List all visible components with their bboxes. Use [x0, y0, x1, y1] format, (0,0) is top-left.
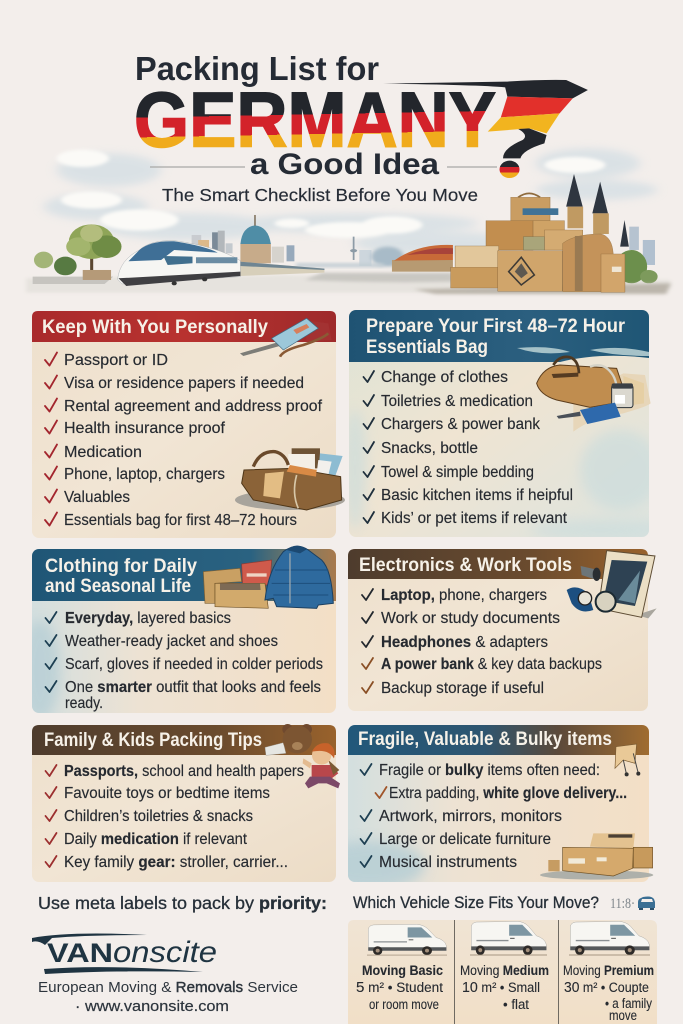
panel: electronics and work tools [348, 549, 657, 711]
checklist: Fragile or bulky items often need: [379, 762, 600, 779]
illustration: cathedral spires [566, 174, 658, 283]
illustration: ground and road [26, 273, 671, 293]
panel heading: Keep With You Personally [42, 317, 268, 338]
icon: duffel bag, jar and blue case [537, 357, 651, 432]
checklist: Health insurance proof [64, 420, 226, 437]
time note: 11:8· [610, 896, 635, 912]
card: moving medium: 10 m² • Small [462, 979, 540, 996]
checklist: Work or study documents [381, 610, 560, 627]
panel heading [32, 311, 336, 342]
card: moving medium [460, 921, 549, 1012]
panel heading: Clothing for Daily [45, 556, 197, 577]
panel: first 48-72 hour essentials bag [343, 310, 670, 540]
checklist: Passport or ID [64, 352, 168, 369]
checklist: Extra padding, white glove delivery... [389, 785, 627, 802]
checklist [46, 610, 323, 712]
illustration: high speed train [118, 241, 324, 286]
heading: which vehicle size: Which Vehicle Size Fits Your Move? [353, 894, 599, 912]
checklist: Key family gear: stroller, carrier... [64, 854, 288, 871]
panel heading [348, 549, 648, 579]
checklist: One smarter outfit that looks and feels [65, 679, 321, 696]
card: moving basic: Moving Basic [362, 963, 443, 978]
checklist: Kids’ or pet items if relevant [381, 510, 568, 527]
illustration: stack of moving boxes [414, 193, 671, 294]
icon: teddy bear and doll [265, 724, 340, 788]
checklist [364, 369, 573, 527]
checklist: Headphones & adapters [381, 634, 548, 651]
panel: vehicle sizes [348, 920, 657, 1024]
card: moving premium: 30 m² • Coupte [564, 979, 649, 996]
illustration: stadium [392, 245, 453, 272]
subtitle: a Good Idea: a Good Idea [250, 148, 439, 181]
icon: wrapped artwork on stand [615, 744, 640, 776]
checklist: Scarf, gloves if needed in colder periods [65, 656, 323, 673]
tagline: The Smart Checklist Before You Move [162, 185, 478, 205]
illustration: trees [34, 224, 122, 280]
checklist: Large or delicate furniture [379, 831, 551, 848]
panel heading: Family & Kids Packing Tips [44, 730, 262, 751]
checklist: Essentials bag for first 48–72 hours [64, 512, 297, 529]
checklist: Phone, laptop, chargers [64, 466, 225, 483]
checklist [46, 763, 304, 871]
illustration: city buildings and dome [192, 215, 404, 267]
title: Germany: GERMANY [134, 76, 496, 164]
checklist: Passports, school and health papers [64, 763, 304, 780]
title: Packing List for: Packing List for [135, 50, 379, 87]
card: moving premium: Moving Premium [563, 963, 654, 978]
card: moving medium: • flat [503, 997, 529, 1012]
checklist: A power bank & key data backups [381, 656, 602, 673]
checklist: ready. [65, 695, 103, 712]
icon: packed brown bag [235, 448, 345, 510]
checklist: Medication [64, 444, 142, 461]
checklist: Backup storage if useful [381, 680, 544, 697]
card: moving premium: • a family [605, 996, 652, 1011]
icon: tablet, headphones and camera [567, 551, 657, 618]
card: moving basic [356, 924, 447, 1012]
checklist: Children’s toiletries & snacks [64, 808, 253, 825]
panel heading [32, 549, 336, 601]
icon: passport and pens [240, 318, 332, 357]
checklist: Basic kitchen items if heipful [381, 487, 573, 504]
card: moving medium: Moving Medium [460, 963, 549, 978]
checklist: Artwork, mirrors, monitors [379, 808, 562, 825]
panel heading [349, 310, 649, 362]
logo: VANonscite [32, 934, 217, 974]
checklist: Toiletries & medication [381, 393, 533, 410]
checklist: Towel & simple bedding [381, 464, 534, 481]
checklist: Rental agreement and address proof [64, 398, 323, 415]
checklist [360, 762, 627, 871]
panel heading [348, 725, 649, 755]
checklist [45, 352, 323, 529]
panel: clothing for daily and seasonal life [20, 546, 336, 720]
panel: fragile, valuable and bulky items [348, 725, 654, 882]
checklist: Weather-ready jacket and shoes [65, 633, 278, 650]
panel heading: Electronics & Work Tools [359, 555, 572, 576]
card: moving basic: 5 m² • Student [356, 979, 443, 996]
header illustration: skyline, train and moving boxes [26, 148, 671, 294]
checklist: Daily medication if relevant [64, 831, 248, 848]
illustration: watercolor sky and clouds [44, 148, 658, 255]
panel heading: Fragile, Valuable & Bulky items [358, 729, 612, 750]
icon: car [638, 896, 655, 910]
panel heading: Essentials Bag [366, 337, 488, 358]
checklist [362, 587, 602, 697]
checklist: Chargers & power bank [381, 416, 541, 433]
checklist: Musical instruments [379, 854, 517, 871]
checklist: Visa or residence papers if needed [64, 375, 304, 392]
card: moving premium [563, 921, 654, 1023]
panel: keep with you personally [32, 311, 345, 538]
icon: boxes and blue jacket [203, 546, 333, 608]
title: Germany question mark flag [383, 80, 588, 178]
card: moving premium: move [609, 1008, 637, 1023]
checklist: Laptop, phone, chargers [381, 587, 547, 604]
company website: · www.vanonsite.com [75, 998, 229, 1015]
checklist: Everyday, layered basics [65, 610, 231, 627]
checklist: Favouite toys or bedtime items [64, 785, 270, 802]
logo: VANonscite: onscite [113, 936, 217, 969]
note: pack by priority: Use meta labels to pack by priority: [38, 893, 327, 913]
company tagline: European Moving & Removals Service [38, 979, 298, 996]
panel heading [32, 725, 336, 755]
checklist: Change of clothes [381, 369, 508, 386]
checklist: Valuables [64, 489, 130, 506]
panel heading: Prepare Your First 48–72 Hour [366, 316, 626, 337]
icon: large moving crates [540, 833, 653, 880]
panel heading: and Seasonal Life [45, 576, 191, 597]
checklist: Snacks, bottle [381, 440, 478, 457]
logo: VANonscite: VAN [47, 938, 113, 968]
panel: family and kids packing tips [32, 724, 340, 882]
card: moving basic: or room move [369, 997, 439, 1012]
